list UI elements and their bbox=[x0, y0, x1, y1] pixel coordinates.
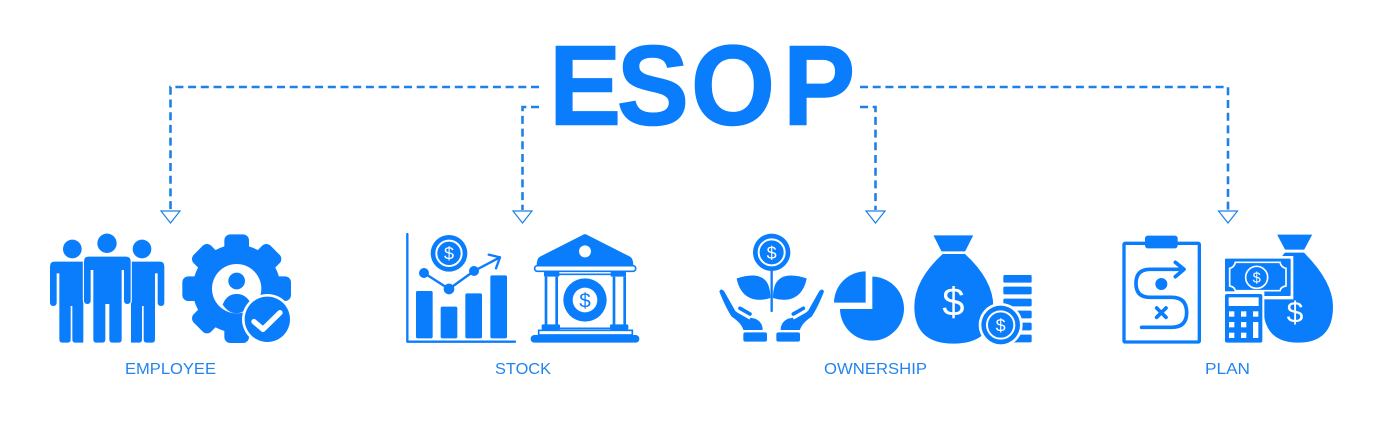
arrow: to plan bbox=[860, 87, 1238, 223]
arrow: to ownership bbox=[860, 107, 885, 223]
icon: bank building bbox=[531, 234, 639, 343]
icon: hands with money plant bbox=[719, 234, 824, 342]
icon: hands with money plant: $ bbox=[767, 243, 777, 263]
icon: stock chart: $ bbox=[444, 244, 454, 264]
icon: money bag and coin stack: $ bbox=[942, 280, 964, 324]
arrow: to employee bbox=[161, 87, 539, 223]
icon: clipboard strategy plan bbox=[1124, 236, 1199, 342]
label: ownership: OWNERSHIP bbox=[824, 361, 927, 378]
icon: money bag, banknote and calculator bbox=[1223, 235, 1333, 345]
icon: stock chart bbox=[407, 234, 515, 342]
label: plan: PLAN bbox=[1205, 361, 1250, 378]
icon: pie chart bbox=[834, 271, 904, 341]
icon: money bag and coin stack bbox=[914, 236, 1032, 347]
icon: money bag, banknote and calculator: $ bbox=[1253, 271, 1261, 287]
label: employee: EMPLOYEE bbox=[125, 361, 216, 378]
icon: money bag and coin stack: $ bbox=[996, 316, 1006, 336]
icon: money bag, banknote and calculator: $ bbox=[1287, 297, 1304, 330]
title: ESOP bbox=[549, 23, 855, 149]
icon: bank building: $ bbox=[579, 290, 591, 313]
icon: gear with person and check bbox=[182, 234, 293, 345]
icon: employee group bbox=[50, 234, 164, 343]
label: stock: STOCK bbox=[495, 361, 551, 378]
arrow: to stock bbox=[513, 107, 539, 223]
